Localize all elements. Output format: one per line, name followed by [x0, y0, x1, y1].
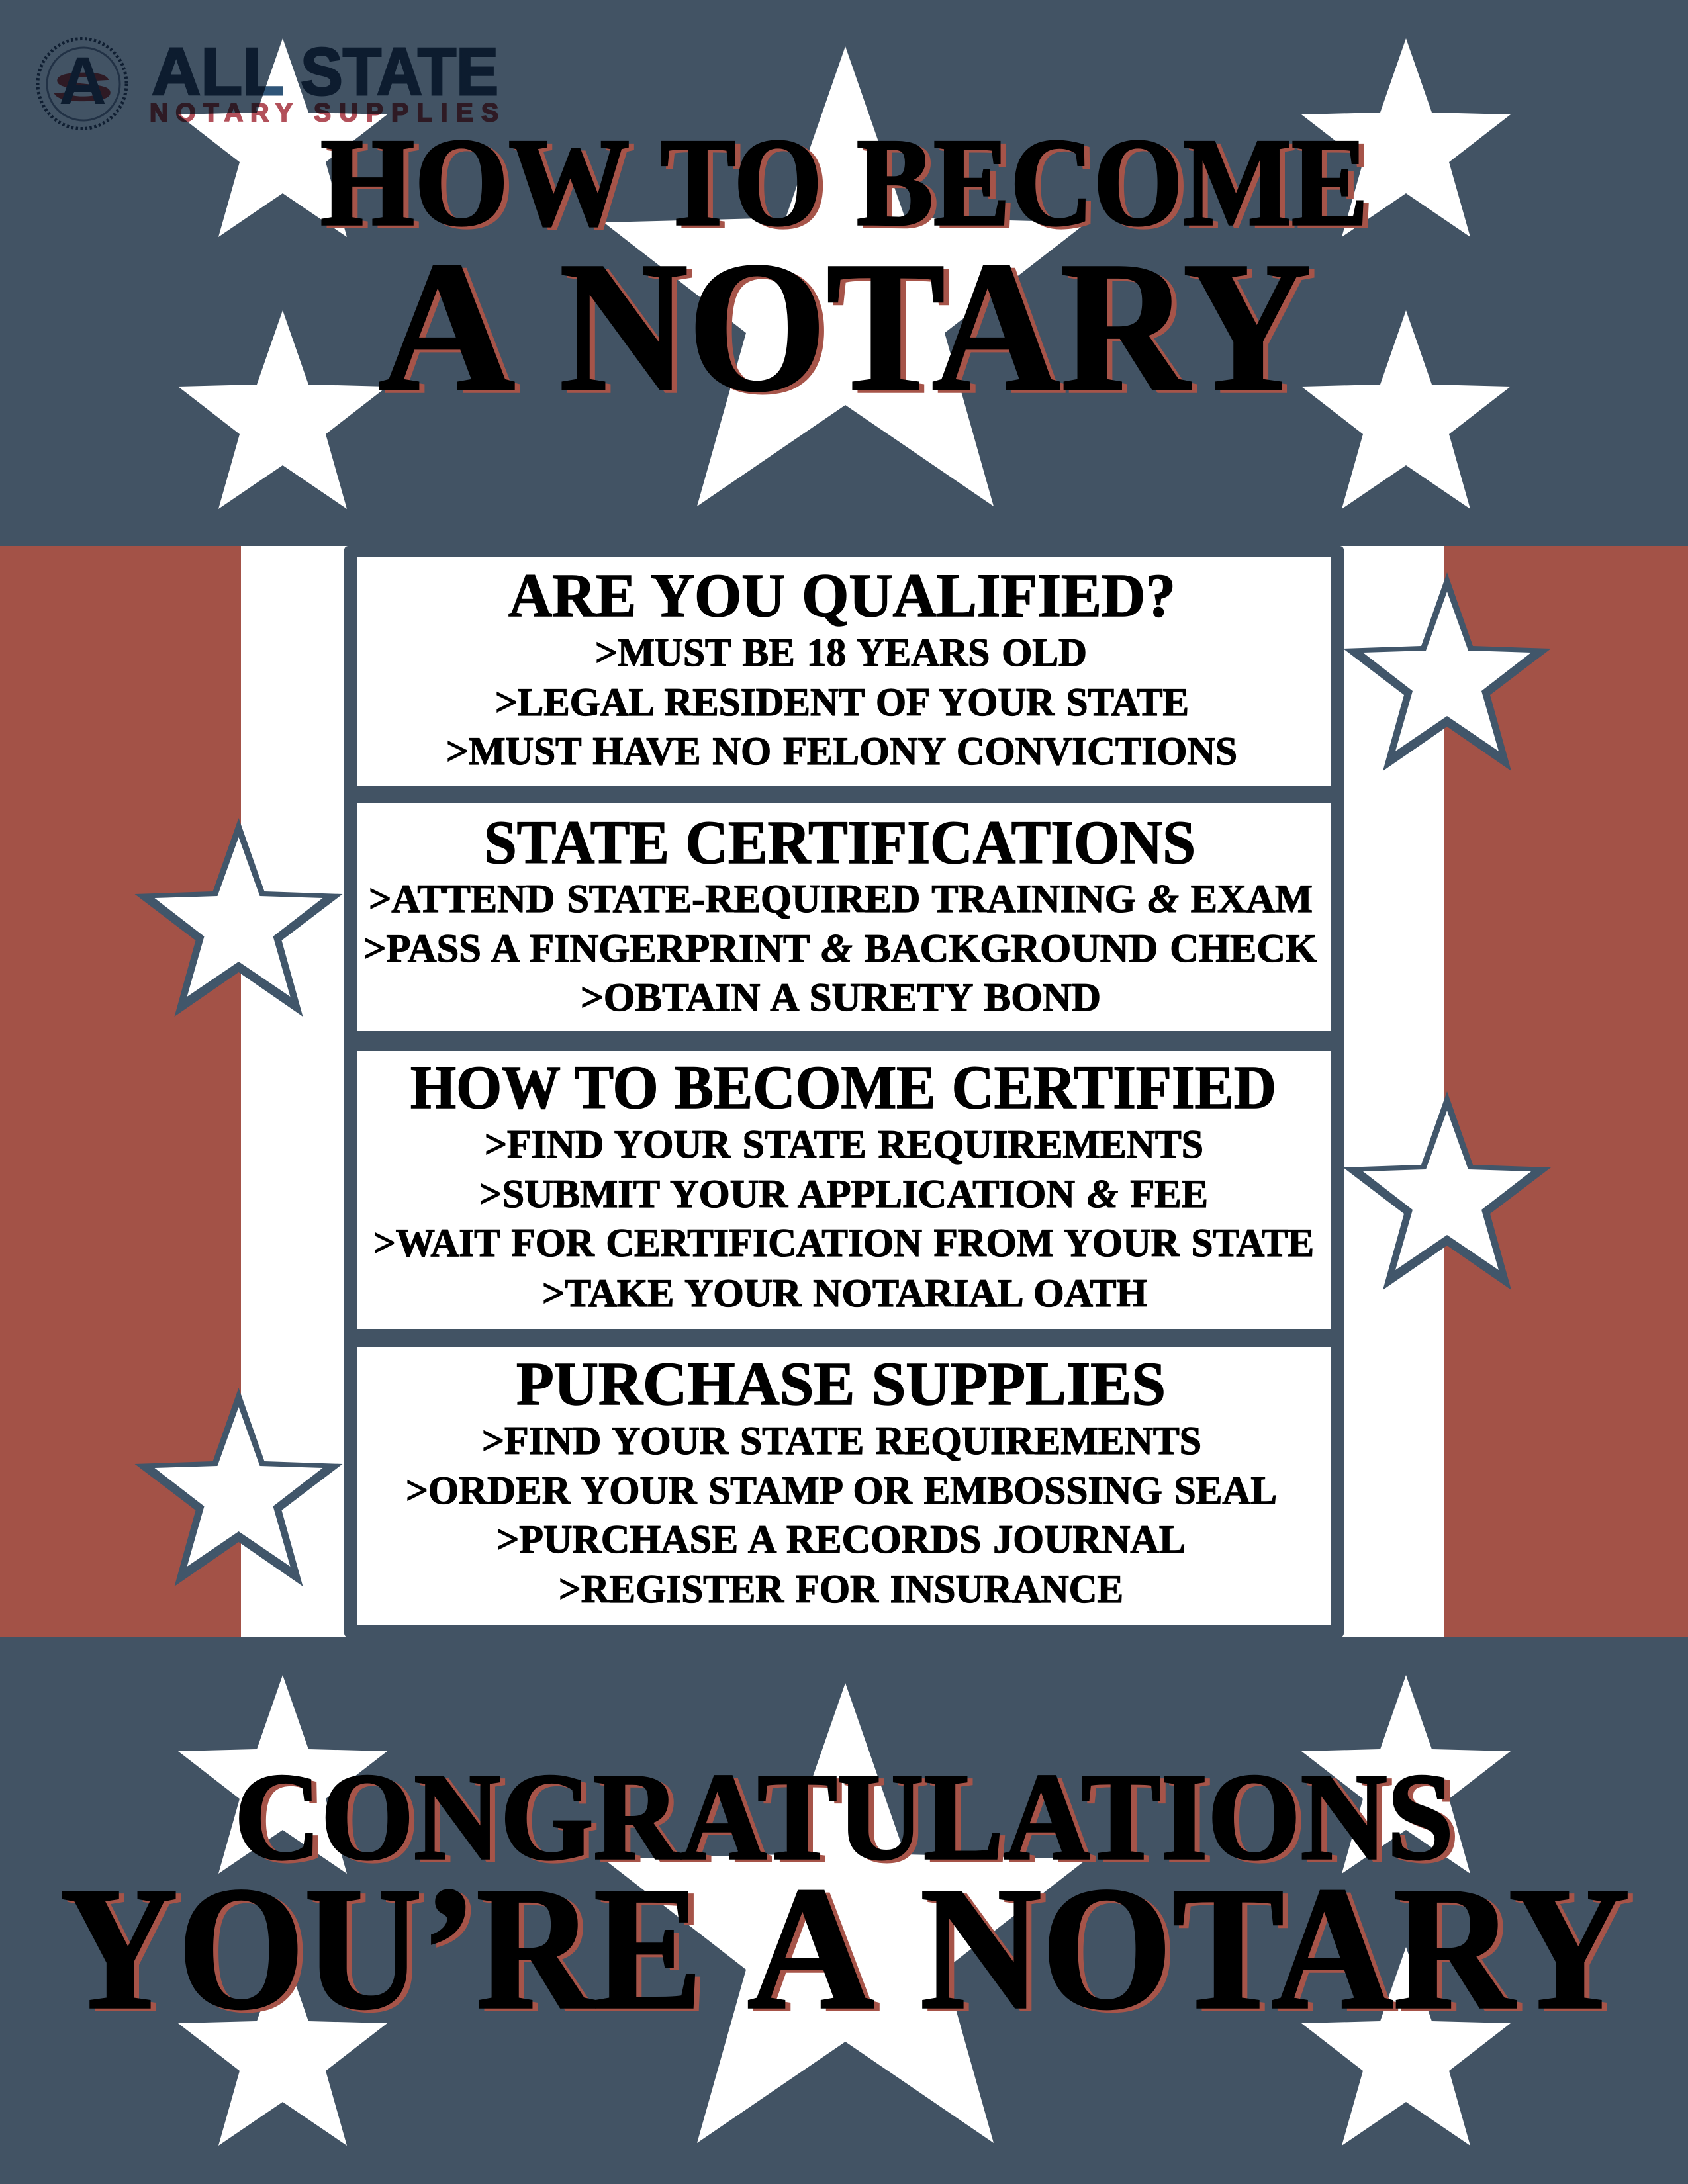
steps list: purchase supplies: >PURCHASE A RECORDS JOURNAL: [496, 1518, 1186, 1561]
requirements list: certifications: >OBTAIN A SURETY BOND: [581, 976, 1101, 1019]
stars: top banner: [178, 38, 1511, 509]
requirements list: qualified: >MUST HAVE NO FELONY CONVICTIONS: [446, 729, 1237, 773]
title: how to become: TO: [660, 113, 822, 252]
logo seal: [38, 38, 126, 128]
star outline: left lower: [135, 1388, 343, 1586]
requirements list: certifications: >ATTEND STATE-REQUIRED TRAINING & EXAM: [369, 877, 1313, 921]
panel: state certifications: [357, 803, 1331, 1031]
heading: purchase supplies: PURCHASE SUPPLIES: [516, 1350, 1166, 1418]
steps list: become certified: >FIND YOUR STATE REQUIREMENTS: [485, 1122, 1203, 1166]
title: how to become: BECOME: [862, 116, 1374, 255]
logo seal: A: [59, 43, 107, 118]
requirements list: qualified: >LEGAL RESIDENT OF YOUR STATE: [495, 680, 1189, 724]
title: how to become: BECOME: [857, 113, 1368, 252]
logo wordmark: SUPPLIES: [314, 99, 498, 127]
steps list: purchase supplies: >ORDER YOUR STAMP OR EMBOSSING SEAL: [406, 1469, 1277, 1512]
steps list: purchase supplies: >REGISTER FOR INSURANCE: [559, 1567, 1123, 1611]
striped band: [0, 546, 1688, 1637]
title: you're a notary: YOU’RE: [66, 1853, 708, 2048]
requirements list: qualified: >MUST BE 18 YEARS OLD: [595, 631, 1087, 674]
requirements list: certifications: >PASS A FINGERPRINT & BACKGROUND CHECK: [363, 927, 1317, 970]
star outline: right lower: [1343, 1091, 1551, 1290]
steps list: become certified: [373, 1122, 1314, 1315]
title: you're a notary: YOU’RE: [60, 1850, 702, 2046]
stars: bottom banner: [178, 1675, 1511, 2146]
heading: are you qualified: ARE YOU QUALIFIED?: [508, 562, 1176, 630]
requirements list: certifications: [363, 877, 1317, 1019]
title: a notary: A: [379, 224, 515, 430]
logo wordmark: [150, 35, 498, 127]
title: how to become: TO: [665, 116, 827, 255]
title: you're a notary: NOTARY: [925, 1853, 1635, 2048]
star outline: right upper: [1343, 572, 1551, 771]
star outline: left upper: [135, 818, 343, 1017]
title: you're a notary: A: [753, 1853, 880, 2048]
logo wordmark: STATE: [301, 35, 498, 109]
title: how to become: HOW: [320, 113, 630, 252]
steps list: purchase supplies: [406, 1419, 1277, 1611]
logo wordmark: ALL: [152, 35, 284, 109]
requirements list: qualified: [446, 631, 1237, 773]
steps list: become certified: >WAIT FOR CERTIFICATION FROM YOUR STATE: [373, 1221, 1314, 1265]
title: how to become: [320, 113, 1374, 255]
title: a notary: NOTARY: [565, 226, 1317, 432]
logo: All State Notary Supplies: [38, 35, 498, 128]
heading: state certifications: STATE CERTIFICATIONS: [484, 809, 1196, 877]
panel: purchase supplies: [357, 1347, 1331, 1625]
title: how to become: HOW: [326, 116, 635, 255]
title: a notary: NOTARY: [559, 224, 1311, 430]
heading: how to become certified: HOW TO BECOME CERTIFIED: [410, 1054, 1276, 1122]
title: you're a notary: [60, 1850, 1635, 2048]
logo wordmark: NOTARY: [150, 99, 293, 127]
title: you're a notary: A: [747, 1850, 874, 2046]
title: you're a notary: NOTARY: [920, 1850, 1630, 2046]
steps list: become certified: >SUBMIT YOUR APPLICATION & FEE: [479, 1172, 1208, 1216]
panel: how to become certified: [357, 1051, 1331, 1329]
title: congratulations: CONGRATULATIONS: [240, 1750, 1459, 1888]
logo seal: S: [52, 65, 113, 109]
steps list: purchase supplies: >FIND YOUR STATE REQUIREMENTS: [482, 1419, 1201, 1463]
steps list: become certified: >TAKE YOUR NOTARIAL OATH: [542, 1271, 1147, 1315]
panel: are you qualified: [357, 557, 1331, 786]
title: congratulations: CONGRATULATIONS: [234, 1747, 1454, 1886]
title: a notary: A: [384, 226, 520, 432]
